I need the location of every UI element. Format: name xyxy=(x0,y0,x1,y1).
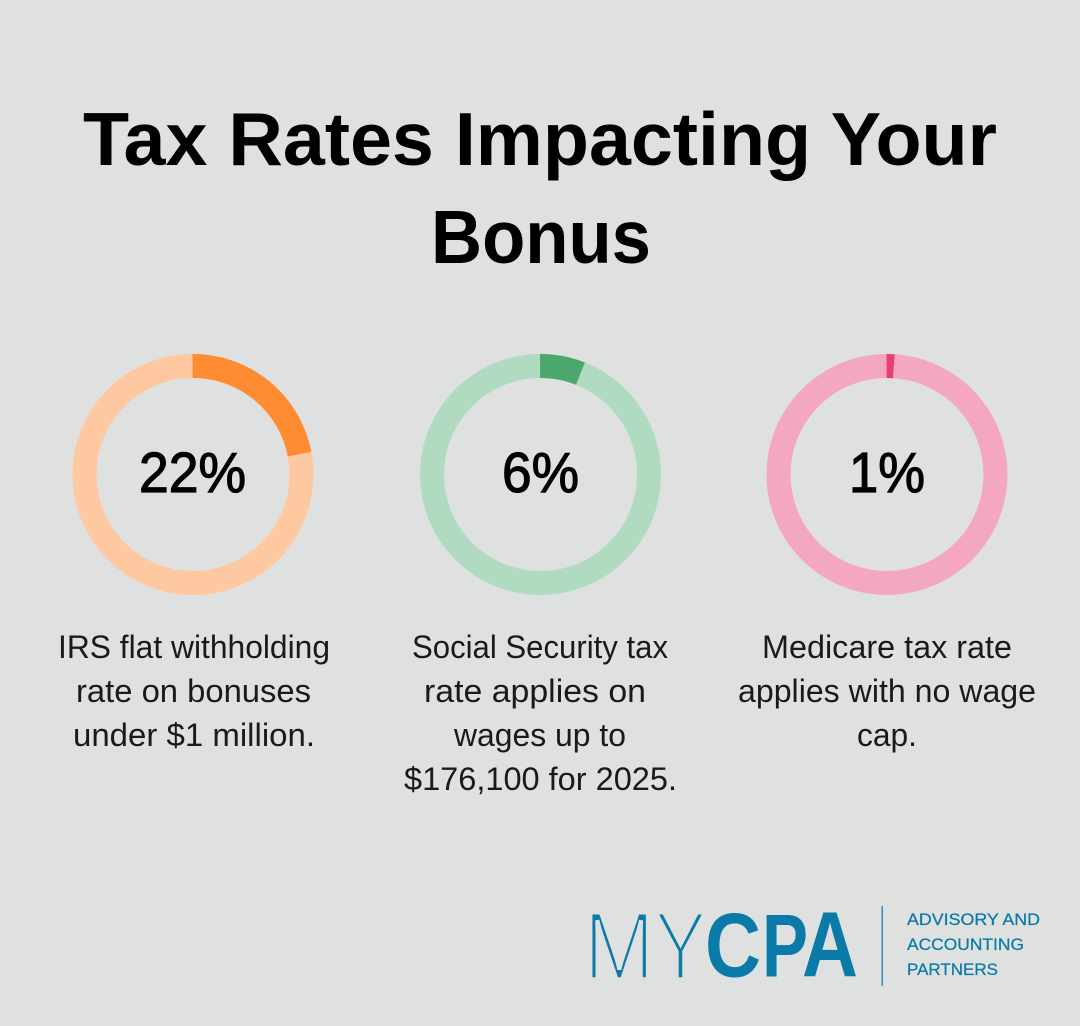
value: 22%: 22% xyxy=(139,441,246,505)
description: IRS withholding: under $1 million. xyxy=(73,717,315,753)
title xyxy=(83,97,997,279)
wordmark xyxy=(583,891,858,1000)
tagline xyxy=(907,910,1040,979)
wordmark: Y xyxy=(654,891,707,1000)
title: Tax Rates Impacting Your xyxy=(83,97,997,181)
description: Social Security: wages up to xyxy=(453,717,626,753)
tagline: ACCOUNTING xyxy=(907,935,1024,954)
description: IRS withholding xyxy=(58,629,330,753)
wordmark: M xyxy=(583,891,655,1000)
description: Medicare: applies with no wage xyxy=(738,673,1036,709)
description: Social Security: $176,100 for 2025. xyxy=(404,761,677,797)
donut chart: 22% xyxy=(84,366,302,583)
description: IRS withholding: rate on bonuses xyxy=(76,673,311,709)
tagline: PARTNERS xyxy=(907,960,998,979)
description: Social Security: rate applies on xyxy=(424,673,646,709)
description: IRS withholding: IRS flat withholding xyxy=(58,629,330,665)
value: 6%: 6% xyxy=(502,441,579,505)
donut chart: 6% xyxy=(432,366,649,583)
panel: IRS flat withholding 22% xyxy=(58,366,330,753)
tagline: ADVISORY AND xyxy=(907,910,1040,929)
panel: Social Security 6% xyxy=(404,366,677,797)
wordmark: P xyxy=(762,896,808,996)
description: Medicare xyxy=(738,629,1036,753)
wordmark: A xyxy=(802,892,858,996)
donut chart: 1% xyxy=(778,366,996,583)
divider xyxy=(882,906,883,986)
panel: Medicare 1% xyxy=(738,366,1036,753)
description: Social Security xyxy=(404,629,677,797)
title: Bonus xyxy=(431,195,651,279)
description: Medicare: Medicare tax rate xyxy=(762,629,1012,665)
wordmark: C xyxy=(705,896,761,996)
description: Social Security: Social Security tax xyxy=(412,629,668,665)
logo: MYCPA xyxy=(583,891,1040,1000)
value: 1%: 1% xyxy=(849,441,925,505)
description: Medicare: cap. xyxy=(857,717,917,753)
